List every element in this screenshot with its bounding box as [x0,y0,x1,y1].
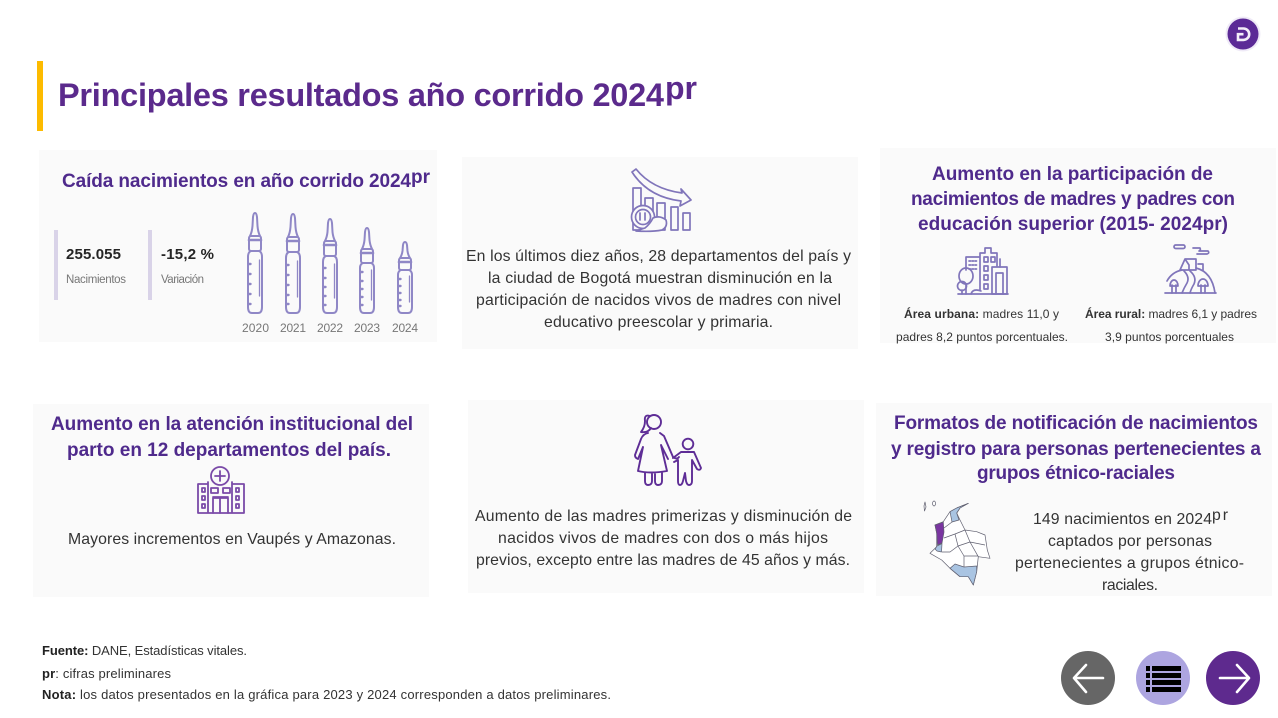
text block: pertenecientes a grupos étnico- [1015,555,1244,572]
panel heading: nacimientos de madres y padres con [911,189,1235,210]
button: previous [1061,651,1115,705]
text block: la ciudad de Bogotá muestran disminución en la [488,270,832,287]
stat: variacion [148,230,214,300]
panel heading: parto en 12 departamentos del país. [67,440,391,461]
year labels: 2024 [392,321,418,335]
panel heading: Formatos de notificación de nacimientos [894,413,1258,434]
footnotes: pr: cifras preliminares [42,666,172,681]
stat: nacimientos: 255.055 [66,246,121,263]
bottle 2024 [398,242,412,313]
text: area rural [1085,306,1257,344]
panel heading: y registro para personas pertenecientes a [891,439,1261,460]
text block: Mayores incrementos en Vaupés y Amazonas. [68,531,396,548]
text: area rural: Área rural: madres 6,1 y padres [1085,306,1257,321]
text block: pr [1212,507,1228,524]
button: next [1206,651,1260,705]
year labels [242,321,418,335]
panel: caida nacimientos [39,150,437,342]
panel heading: grupos étnico-raciales [977,463,1175,484]
text block [466,248,851,331]
text block: Aumento de las madres primerizas y disminución de [475,508,852,525]
text block: participación de nacidos vivos de madres con nivel [476,292,841,309]
icon: city [958,248,1008,294]
footnotes: Fuente: DANE, Estadísticas vitales. [42,643,247,658]
panel heading: pr [411,167,431,188]
icon: rural house [1165,245,1216,293]
button: menu [1136,651,1190,705]
logo [1226,16,1260,52]
panel: educacion preescolar [462,157,858,349]
panel heading: Aumento en la atención institucional del [51,414,413,435]
text: area urbana: padres 8,2 puntos porcentuales. [896,330,1068,344]
bottle chart [242,213,418,335]
year labels: 2021 [280,321,306,335]
panel heading [891,413,1261,484]
year labels: 2023 [354,321,380,335]
text: area urbana [896,306,1068,344]
panel: madres primerizas [468,400,864,593]
bottle 2020 [248,213,262,313]
bottle 2023 [360,228,374,313]
stat: variacion: -15,2 % [161,246,214,263]
panel heading: Aumento en la participación de [932,164,1213,185]
text block [1015,507,1244,594]
text block [475,508,852,569]
bottle 2022 [323,219,337,313]
panel heading: educación superior (2015- 2024pr) [918,214,1228,235]
text block: En los últimos diez años, 28 departamentos del país y [466,248,851,265]
text: area rural: 3,9 puntos porcentuales [1105,330,1234,344]
icon: mother and child [635,415,701,485]
map of Colombia [924,501,990,585]
text: area urbana: Área urbana: madres 11,0 y [904,306,1059,321]
panel: atencion institucional [33,404,429,597]
title: pr [665,70,697,106]
icon: falling chart with baby [632,169,691,231]
panel heading [911,164,1235,235]
footnotes: Nota: los datos presentados en la gráfica para 2023 y 2024 corresponden a datos preliminares. [42,687,611,702]
stat: variacion: Variación [161,274,204,286]
footnotes [42,643,611,702]
panel: educacion superior [880,148,1276,344]
panel heading [51,414,413,461]
text block: 149 nacimientos en 2024 [1033,511,1212,528]
year labels: 2020 [242,321,269,335]
title: Principales resultados año corrido 2024 [58,77,664,113]
text block: raciales. [1102,577,1158,594]
text block: nacidos vivos de madres con dos o más hijos [498,530,828,547]
panel: formatos de notificacion [876,403,1272,596]
panel heading: Caída nacimientos en año corrido 2024 [62,171,411,192]
text block: educativo preescolar y primaria. [544,314,773,331]
icon: hospital [198,467,244,513]
stat: nacimientos [54,230,126,300]
text block: previos, excepto entre las madres de 45 años y más. [476,552,850,569]
year labels: 2022 [317,321,343,335]
stat: nacimientos: Nacimientos [66,274,126,286]
bottle 2021 [286,214,300,313]
accent bar [37,61,43,131]
text block: captados por personas [1048,533,1212,550]
